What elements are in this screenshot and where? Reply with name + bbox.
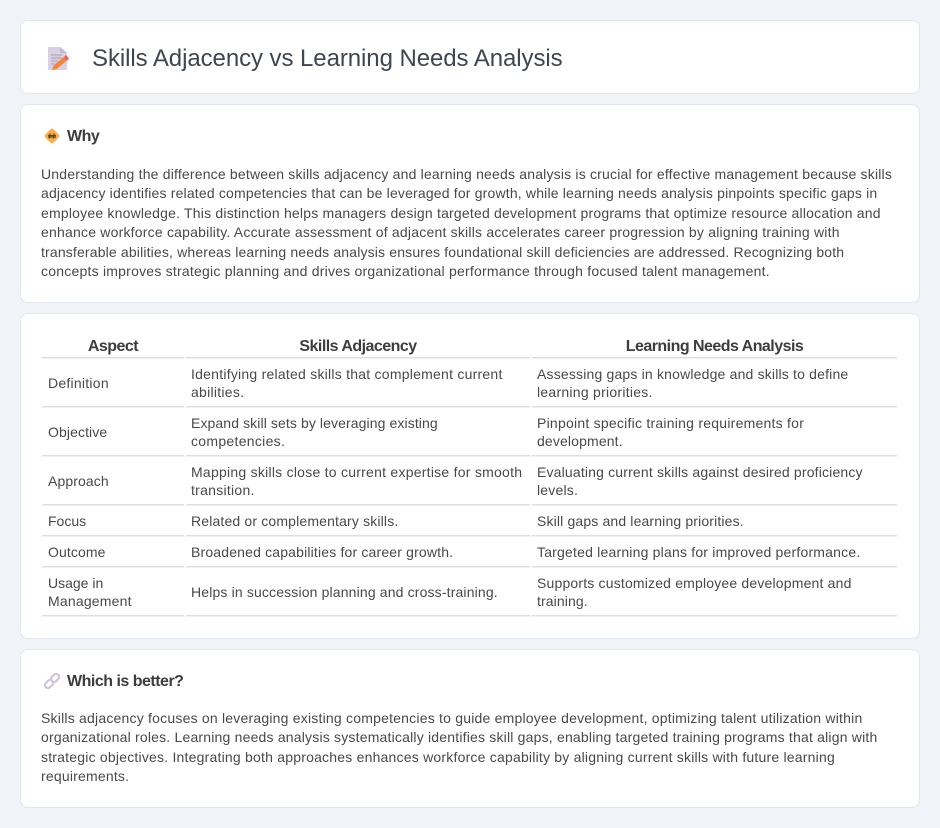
table header row: Aspect: [88, 338, 138, 355]
row: outcome: Broadened capabilities for career growth.: [191, 544, 453, 560]
text block: which is better explanation: Skills adjacency focuses on leveraging existing competencies to guide employee development, optimizing talent utilization within: [41, 710, 862, 726]
table header row: [88, 338, 804, 355]
row: objective: Objective: [48, 424, 107, 440]
row: objective: Pinpoint specific training requirements for: [537, 415, 804, 431]
panel: comparison table: [20, 313, 920, 639]
title: Skills Adjacency vs Learning Needs Analysis: [92, 45, 563, 72]
row: definition: [48, 366, 848, 400]
row: definition: abilities.: [191, 384, 244, 400]
row: outcome: [48, 544, 860, 560]
panel: which is better: [20, 649, 920, 808]
row: objective: [48, 415, 804, 449]
row: outcome: Outcome: [48, 544, 106, 560]
row: usage in management: [48, 575, 852, 609]
panel: why: [20, 104, 920, 303]
text block: why explanation: Understanding the difference between skills adjacency and learning needs analysis is crucial for effective management because skills: [41, 166, 892, 182]
heading: why: Why: [67, 128, 99, 145]
row: usage in management: Helps in succession planning and cross-training.: [191, 584, 498, 600]
text block: why explanation: [41, 166, 892, 279]
row: approach: Mapping skills close to current expertise for smooth: [191, 464, 522, 480]
panel: title header: [20, 20, 920, 94]
table header row: Learning Needs Analysis: [626, 338, 803, 355]
row: objective: development.: [537, 433, 623, 449]
row: usage in management: Supports customized employee development and: [537, 575, 852, 591]
text block: which is better explanation: [41, 710, 877, 784]
row: outcome: Targeted learning plans for improved performance.: [537, 544, 860, 560]
row: usage in management: Management: [48, 593, 132, 609]
row: objective: competencies.: [191, 433, 285, 449]
row: usage in management: Usage in: [48, 575, 103, 591]
row: approach: [48, 464, 863, 498]
row: definition: Definition: [48, 375, 109, 391]
row: focus: Skill gaps and learning priorities.: [537, 513, 744, 529]
row: approach: transition.: [191, 482, 255, 498]
table header row: Skills Adjacency: [299, 338, 417, 355]
row: usage in management: training.: [537, 593, 588, 609]
row: definition: Assessing gaps in knowledge and skills to define: [537, 366, 848, 382]
text block: why explanation: concepts improves strategic planning and drives organizational performance through focused talent management.: [41, 263, 770, 279]
text block: why explanation: adjacency identifies related competencies that can be leveraged for growth, while learning needs analysis pinpoints specific gaps in: [41, 185, 877, 201]
text block: why explanation: transferable abilities, whereas learning needs analysis ensures foundational skill deficiencies are addressed. Recognizing both: [41, 244, 844, 260]
icon: chain link: [44, 672, 60, 690]
row: definition: learning priorities.: [537, 384, 653, 400]
row: approach: levels.: [537, 482, 578, 498]
text block: which is better explanation: organizational roles. Learning needs analysis systematically identifies skill gaps, enabling targeted training programs that align with: [41, 729, 877, 745]
text block: which is better explanation: strategic objectives. Integrating both approaches enhances workforce capability by aligning current skills with future learning: [41, 749, 835, 765]
text block: which is better explanation: requirements.: [41, 768, 129, 784]
row: focus: Related or complementary skills.: [191, 513, 398, 529]
icon: orange diamond sign: [44, 128, 60, 144]
heading: which is better: Which is better?: [67, 673, 183, 690]
row: approach: Approach: [48, 473, 109, 489]
icon: document with pencil: [48, 47, 69, 70]
text block: why explanation: employee knowledge. This distinction helps managers design targeted development programs that optimize resource allocation and: [41, 205, 881, 221]
row: definition: Identifying related skills that complement current: [191, 366, 503, 382]
row: objective: Expand skill sets by leveraging existing: [191, 415, 438, 431]
row: approach: Evaluating current skills against desired proficiency: [537, 464, 863, 480]
row: focus: [48, 513, 744, 529]
text block: why explanation: enhance workforce capability. Accurate assessment of adjacent skills accelerates career progression by aligning training with: [41, 224, 840, 240]
row: focus: Focus: [48, 513, 86, 529]
